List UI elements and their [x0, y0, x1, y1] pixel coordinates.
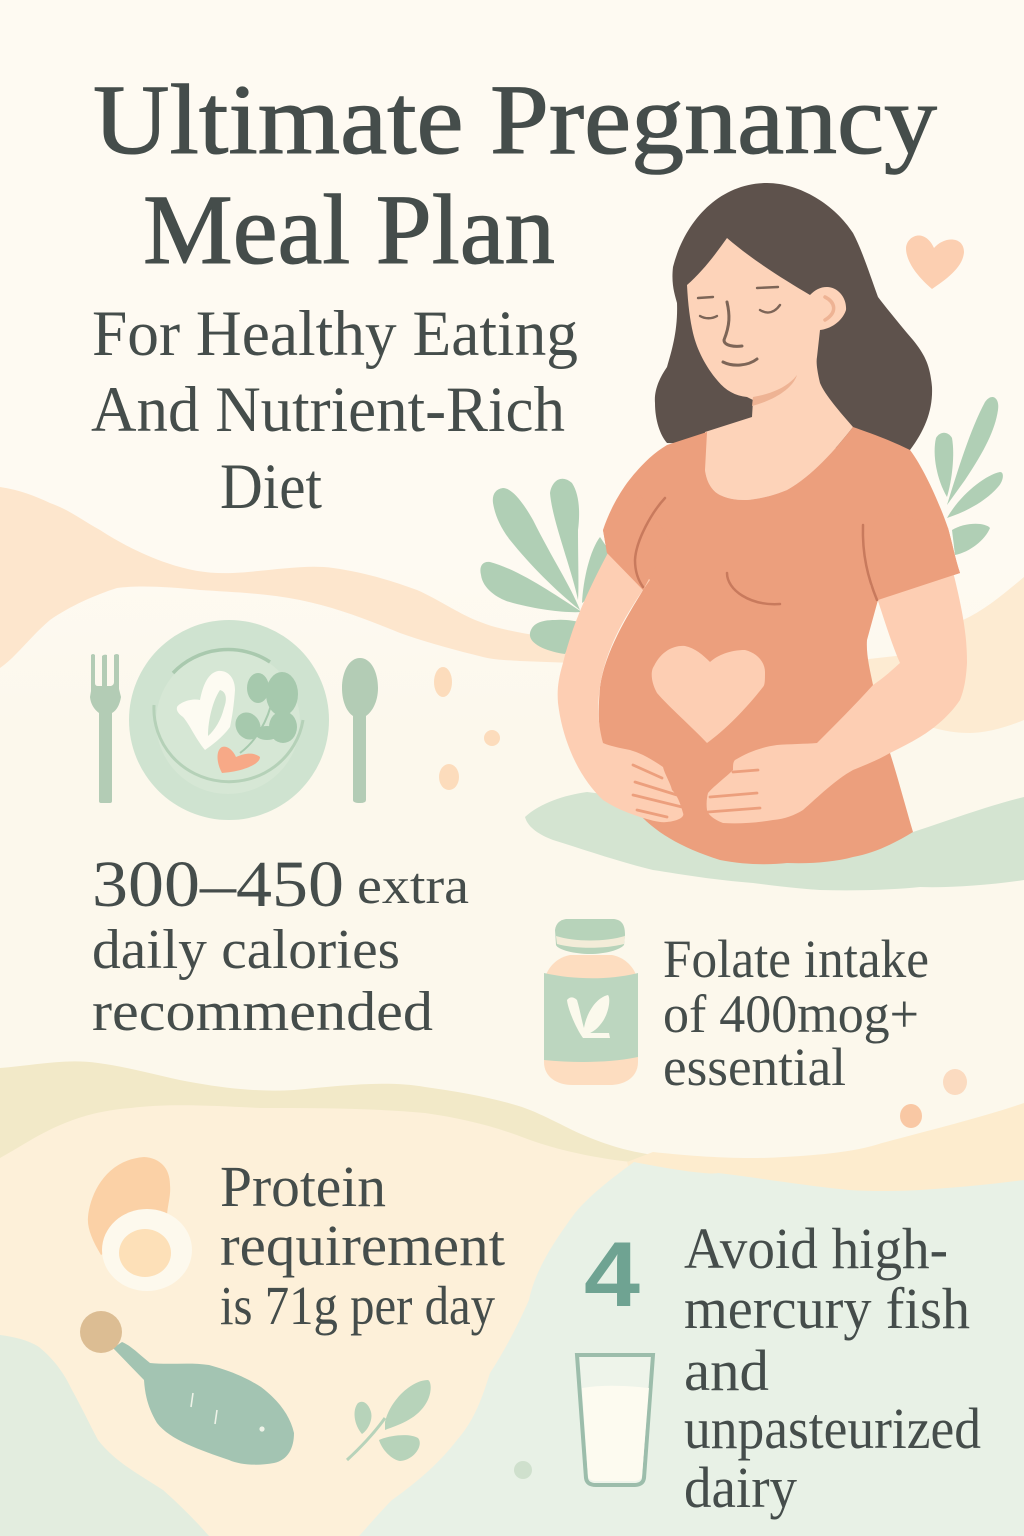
- icon: plate: [129, 620, 329, 820]
- illustration: leaves behind woman: [480, 397, 1003, 654]
- text: calories: extra: [357, 858, 469, 915]
- title: Ultimate Pregnancy: [93, 64, 937, 175]
- icon: spoon: [342, 658, 378, 803]
- icon: heart top right: [906, 235, 964, 289]
- text: avoid: mercury fish: [684, 1276, 970, 1341]
- icon: supplement bottle: [544, 919, 638, 1085]
- text: avoid: [684, 1216, 981, 1520]
- illustration: pregnant woman: [558, 183, 967, 864]
- text: folate: Folate intake: [663, 929, 929, 989]
- shirt folds: [635, 498, 877, 604]
- text: protein: [220, 1154, 505, 1336]
- face details: [698, 287, 834, 365]
- illustration: ground swoosh: [525, 792, 1024, 890]
- text: calories: recommended: [92, 981, 433, 1043]
- subtitle: And Nutrient-Rich: [91, 374, 565, 446]
- icon: small leaf sprig: [347, 1380, 431, 1461]
- text: avoid: and: [684, 1338, 769, 1403]
- text: protein: is 71g per day: [220, 1275, 495, 1336]
- left arm and hand: [558, 540, 683, 822]
- text: protein: requirement: [220, 1213, 505, 1278]
- title: Meal Plan: [143, 174, 555, 285]
- shirt: [599, 427, 960, 864]
- icon: glass of milk: [577, 1355, 653, 1485]
- title: [93, 64, 937, 285]
- fingers: [633, 765, 760, 817]
- text: folate: essential: [663, 1037, 846, 1097]
- decorative dots: [434, 667, 500, 790]
- text: folate: of 400mog+: [663, 984, 919, 1044]
- icon: egg: [88, 1157, 192, 1291]
- text: avoid: unpasteurized: [684, 1396, 981, 1461]
- neck and face: [687, 238, 853, 500]
- text: avoid: Avoid high-: [684, 1216, 948, 1281]
- chin shadow: [752, 375, 797, 406]
- hair: [655, 183, 932, 450]
- text: calories: daily calories: [92, 919, 400, 981]
- left sleeve: [603, 495, 670, 590]
- icon: fork: [90, 654, 121, 803]
- subtitle: For Healthy Eating: [92, 298, 578, 370]
- text: folate: [663, 929, 929, 1097]
- belly heart: [652, 646, 765, 743]
- text: calories: 300–450: [92, 848, 344, 921]
- text: calories: [92, 848, 469, 1043]
- decorative dot: [514, 1461, 532, 1479]
- subtitle: [91, 298, 578, 523]
- decorative dots: [943, 1069, 967, 1095]
- right sleeve: [860, 510, 960, 600]
- right arm and hand: [707, 560, 967, 823]
- subtitle: Diet: [220, 451, 322, 523]
- text: avoid: dairy: [684, 1455, 797, 1520]
- number 4: 4: [584, 1224, 640, 1326]
- text: protein: Protein: [220, 1154, 386, 1219]
- icon: drumstick: [80, 1311, 294, 1465]
